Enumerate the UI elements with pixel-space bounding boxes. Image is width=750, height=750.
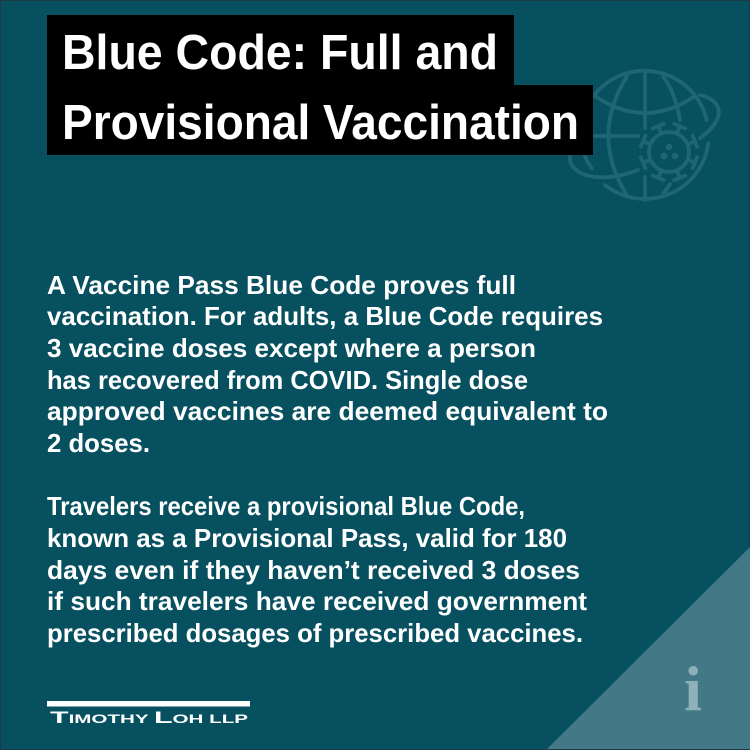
title box line 2: [47, 85, 593, 155]
logo rule: [47, 701, 250, 706]
text block: full vaccination paragraph: A Vaccine Pass Blue Code proves full: [47, 270, 516, 300]
title line 1: Blue Code: Full and: [62, 26, 498, 80]
text block: full vaccination paragraph: has recovered from COVID. Single dose: [47, 365, 528, 395]
text block: provisional pass paragraph: prescribed dosages of prescribed vaccines.: [47, 618, 583, 648]
text block: full vaccination paragraph: [47, 270, 608, 458]
corner triangle: [547, 547, 750, 749]
logo wordmark: T IMOTHY L OH LLP: [50, 708, 249, 727]
icon: globe with virus: [570, 71, 719, 200]
title: [47, 15, 593, 155]
text block: provisional pass paragraph: known as a Provisional Pass, valid for 180: [47, 523, 567, 553]
icon: info: i: [684, 653, 702, 724]
title line 2: Provisional Vaccination: [62, 96, 579, 150]
text block: full vaccination paragraph: 2 doses.: [47, 428, 150, 458]
text block: provisional pass paragraph: if such travelers have received government: [47, 586, 587, 616]
text block: full vaccination paragraph: vaccination. For adults, a Blue Code requires: [47, 301, 603, 331]
corner triangle with info icon: [547, 547, 750, 749]
text block: provisional pass paragraph: days even if they haven’t received 3 doses: [47, 555, 580, 585]
text block: provisional pass paragraph: Travelers receive a provisional Blue Code,: [47, 491, 525, 521]
text block: full vaccination paragraph: 3 vaccine doses except where a person: [47, 333, 536, 363]
title box line 1: [47, 15, 514, 85]
text block: full vaccination paragraph: approved vaccines are deemed equivalent to: [47, 396, 608, 426]
logo: Timothy Loh LLP: [47, 701, 250, 727]
text block: provisional pass paragraph: [47, 491, 587, 648]
